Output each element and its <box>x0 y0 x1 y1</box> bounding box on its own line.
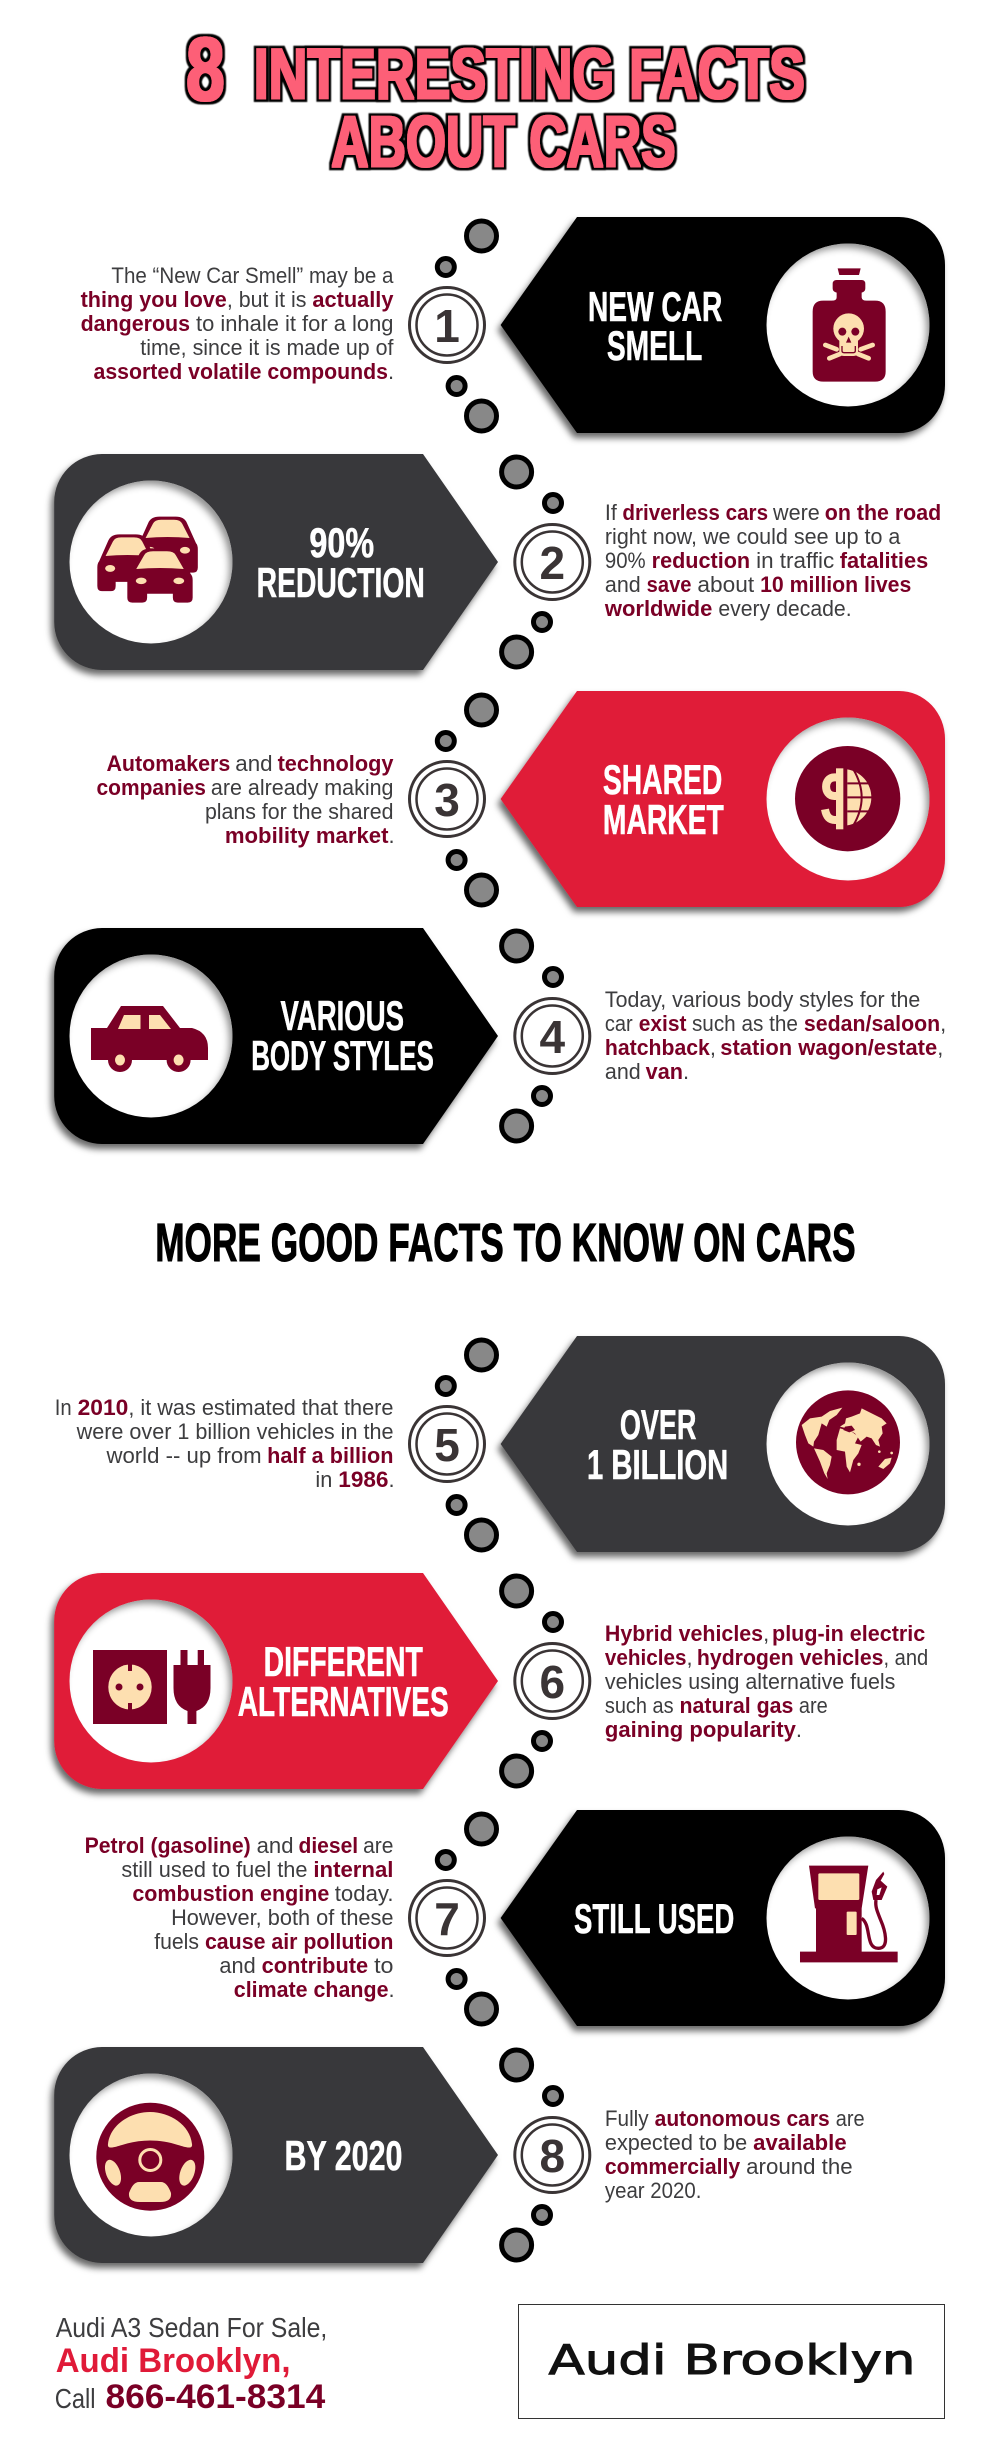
text: fact 1: The “New Car Smell” may be a <box>111 263 394 288</box>
panel: fact 4 various body styles <box>54 928 498 1144</box>
number 6 with dots <box>502 1576 590 1786</box>
text: fact 2: right now, we could see up to a <box>605 524 901 549</box>
heading: various body styles: BODY STYLES <box>251 1032 434 1079</box>
text: fact 2: worldwide <box>604 596 712 621</box>
icon: socket and plug <box>93 1650 210 1724</box>
text: fact 5 <box>55 1395 395 1492</box>
footer contact text: Call <box>55 2383 96 2414</box>
text: fact 7: climate change <box>234 1977 389 2002</box>
text: fact 4: van <box>646 1059 683 1084</box>
heading: over 1 billion <box>587 1401 728 1488</box>
footer contact text: Audi Brooklyn, <box>56 2342 291 2380</box>
panel: fact 2 90% reduction <box>54 454 498 670</box>
text: fact 4: Today, various body styles for the <box>605 987 920 1012</box>
heading: new car smell: NEW CAR <box>588 283 722 330</box>
text: fact 6: vehicles using alternative fuels <box>605 1669 895 1694</box>
text: fact 3: and <box>235 751 273 776</box>
text: fact 7: internal <box>313 1857 393 1882</box>
text: fact 8: year 2020. <box>605 2178 701 2203</box>
heading: over 1 billion: 1 BILLION <box>587 1441 728 1488</box>
panel: fact 1 new car smell <box>501 217 945 433</box>
text: fact 2: 90% <box>605 548 646 573</box>
text: fact 4: hatchback <box>605 1035 711 1060</box>
text: fact 2: save <box>647 572 691 597</box>
panel: fact 6 different alternatives <box>54 1573 498 1789</box>
text: fact 6: gaining popularity <box>605 1717 797 1742</box>
text: fact 4 <box>605 987 946 1084</box>
text: fact 1: actually <box>312 287 394 312</box>
text: fact 5: in <box>315 1467 332 1492</box>
number 5 with dots <box>410 1340 496 1550</box>
text: fact 7: still used to fuel the <box>121 1857 307 1882</box>
text: fact 5: half a billion <box>267 1443 393 1468</box>
icon: steering wheel <box>96 2103 204 2211</box>
text: fact 7: to <box>374 1953 393 1978</box>
text: fact 6: hydrogen vehicles <box>697 1645 883 1670</box>
number 5 with dots: 5 <box>434 1419 460 1471</box>
title: ABOUT CARS <box>331 102 676 183</box>
text: fact 6 <box>605 1621 928 1742</box>
text: fact 4: exist <box>639 1011 687 1036</box>
number 1 with dots <box>410 221 496 431</box>
text: fact 3: Automakers <box>106 751 230 776</box>
text: fact 4: , <box>940 1011 946 1036</box>
footer contact text: Audi A3 Sedan For Sale, <box>56 2312 327 2343</box>
text: fact 7: are <box>363 1833 393 1858</box>
text: fact 7: and <box>219 1953 256 1978</box>
text: fact 6: , <box>686 1645 693 1670</box>
heading: 90% reduction <box>257 519 425 606</box>
text: fact 8: are <box>836 2106 865 2131</box>
number 1 with dots: 1 <box>434 300 460 352</box>
heading: 90% reduction: REDUCTION <box>257 559 425 606</box>
text: fact 7 <box>85 1833 395 2002</box>
text: fact 4: such as the <box>692 1011 798 1036</box>
heading: new car smell: SMELL <box>607 322 702 369</box>
text: fact 7: Petrol (gasoline) <box>85 1833 251 1858</box>
text: fact 8: around the <box>746 2154 853 2179</box>
text: fact 1: thing you love <box>81 287 227 312</box>
heading: shared market: MARKET <box>603 796 724 843</box>
text: fact 2: on the road <box>825 500 941 525</box>
heading: shared market <box>603 756 724 843</box>
text: fact 8: Fully <box>605 2106 649 2131</box>
number 6 with dots: 6 <box>540 1656 565 1708</box>
heading: various body styles: VARIOUS <box>281 992 404 1039</box>
text: fact 7: cause air pollution <box>205 1929 393 1954</box>
icon: dollar globe <box>795 746 900 851</box>
text: fact 2: 10 million lives <box>760 572 911 597</box>
title: 8 <box>186 20 225 120</box>
number 2 with dots <box>502 457 590 667</box>
number 8 with dots: 8 <box>540 2130 565 2182</box>
number 4 with dots: 4 <box>540 1011 566 1063</box>
text: fact 6: natural gas <box>680 1693 793 1718</box>
text: fact 6: Hybrid vehicles <box>605 1621 763 1646</box>
text: fact 2: and <box>605 572 641 597</box>
text: fact 1 <box>81 263 394 384</box>
text: fact 3: . <box>389 823 395 848</box>
number 8 with dots <box>502 2050 590 2260</box>
text: fact 6: are <box>799 1693 828 1718</box>
logo box: audi brooklyn <box>518 2304 944 2418</box>
text: fact 5: were over 1 billion vehicles in the <box>76 1419 393 1444</box>
text: fact 2: every decade. <box>718 596 852 621</box>
text: fact 2: driverless cars <box>622 500 768 525</box>
icon: sedan car <box>91 1006 208 1072</box>
text: fact 4: sedan/saloon <box>804 1011 940 1036</box>
text: fact 8 <box>605 2106 865 2203</box>
text: fact 6: , <box>763 1621 769 1646</box>
text: fact 1: , but it is <box>227 287 306 312</box>
text: fact 5: , it was estimated that there <box>128 1395 393 1420</box>
text: fact 2: in traffic <box>756 548 834 573</box>
text: fact 7: combustion engine <box>132 1881 329 1906</box>
footer contact text <box>55 2312 327 2416</box>
heading: different alternatives: ALTERNATIVES <box>238 1678 449 1725</box>
text: fact 5: 2010 <box>78 1395 128 1420</box>
text: fact 7: However, both of these <box>171 1905 393 1930</box>
text: fact 2: fatalities <box>840 548 928 573</box>
text: fact 1: dangerous <box>81 311 190 336</box>
text: fact 8: available <box>753 2130 847 2155</box>
icon: world globe <box>796 1390 900 1494</box>
text: fact 4: station wagon/estate <box>720 1035 937 1060</box>
text: fact 2 <box>604 500 941 621</box>
text: fact 4: car <box>605 1011 633 1036</box>
text: fact 1: to inhale it for a long <box>196 311 393 336</box>
text: fact 5: . <box>389 1467 395 1492</box>
footer contact text: 866-461-8314 <box>105 2378 325 2416</box>
heading: shared market: SHARED <box>603 756 722 803</box>
heading: by 2020: BY 2020 <box>285 2132 402 2179</box>
number 3 with dots: 3 <box>434 774 460 826</box>
heading: new car smell <box>588 283 722 369</box>
text: fact 3: technology <box>278 751 394 776</box>
text: fact 6: vehicles <box>605 1645 686 1670</box>
text: fact 2: were <box>772 500 820 525</box>
text: fact 3: are already making <box>211 775 393 800</box>
number 4 with dots <box>502 931 590 1141</box>
text: fact 6: plug-in electric <box>772 1621 925 1646</box>
text: fact 4: , <box>710 1035 716 1060</box>
text: fact 5: In <box>55 1395 72 1420</box>
logo box: audi brooklyn: Audi Brooklyn <box>548 2336 916 2384</box>
panel: fact 3 shared market <box>501 691 945 907</box>
text: fact 6: such as <box>605 1693 674 1718</box>
text: fact 1: . <box>388 359 394 384</box>
panel: fact 8 by 2020 <box>54 2047 498 2263</box>
text: fact 3: mobility market <box>225 823 389 848</box>
panel: fact 5 over 1 billion <box>501 1336 945 1552</box>
text: fact 3: companies <box>97 775 206 800</box>
text: fact 3: plans for the shared <box>205 799 393 824</box>
text: fact 6: . <box>796 1717 802 1742</box>
text: fact 4: , <box>937 1035 943 1060</box>
text: fact 8: commercially <box>605 2154 741 2179</box>
icon: fuel pump <box>800 1866 898 1962</box>
number 7 with dots: 7 <box>434 1893 460 1945</box>
icon: traffic cars <box>97 517 198 603</box>
text: fact 1: time, since it is made up of <box>140 335 394 360</box>
number 3 with dots <box>410 695 496 905</box>
number 7 with dots <box>410 1814 496 2024</box>
text: fact 7: today. <box>335 1881 393 1906</box>
heading: various body styles <box>251 992 434 1079</box>
text: fact 2: reduction <box>652 548 750 573</box>
text: fact 5: 1986 <box>338 1467 389 1492</box>
title <box>186 20 805 183</box>
panel: fact 7 still used <box>501 1810 945 2026</box>
text: fact 2: If <box>605 500 618 525</box>
text: fact 7: and <box>257 1833 293 1858</box>
text: fact 4: and <box>605 1059 641 1084</box>
icon: poison bottle <box>813 268 886 382</box>
text: fact 2: about <box>697 572 754 597</box>
heading: 90% reduction: 90% <box>309 519 374 566</box>
text: fact 3 <box>97 751 395 848</box>
text: fact 8: expected to be <box>605 2130 747 2155</box>
heading: different alternatives <box>238 1638 449 1725</box>
text: fact 7: fuels <box>154 1929 199 1954</box>
heading: still used: STILL USED <box>574 1895 734 1942</box>
text: fact 7: diesel <box>298 1833 358 1858</box>
heading: different alternatives: DIFFERENT <box>264 1638 423 1685</box>
text: fact 7: . <box>389 1977 395 2002</box>
text: fact 5: world -- up from <box>105 1443 262 1468</box>
text: fact 1: assorted volatile compounds <box>94 359 388 384</box>
title: INTERESTING FACTS <box>254 35 805 115</box>
heading: over 1 billion: OVER <box>620 1401 696 1448</box>
text: fact 7: contribute <box>262 1953 368 1978</box>
text: fact 8: autonomous cars <box>655 2106 830 2131</box>
number 2 with dots: 2 <box>540 537 565 589</box>
text: fact 4: . <box>683 1059 689 1084</box>
text: fact 6: , and <box>883 1645 928 1670</box>
